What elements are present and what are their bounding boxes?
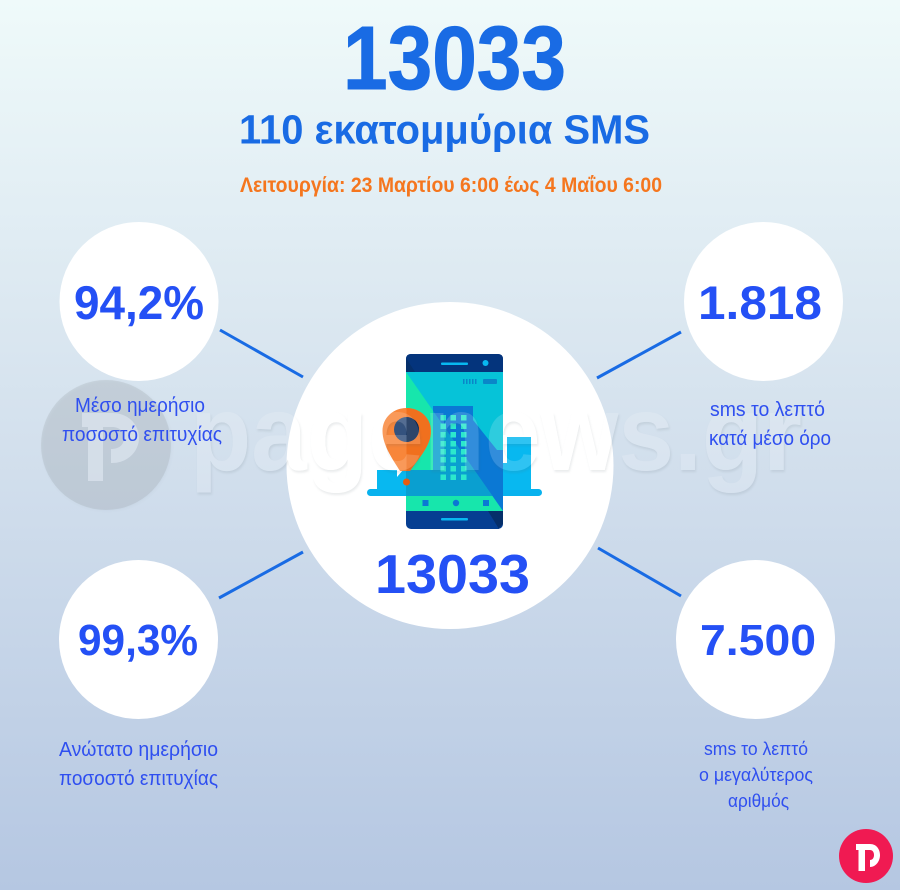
label: peak sms per minute: ο μεγαλύτερος — [699, 765, 813, 785]
label: highest daily success: ποσοστό επιτυχίας — [59, 768, 218, 790]
phone body — [406, 354, 503, 529]
watermark badge — [41, 380, 171, 510]
stat: highest daily success: 99,3% — [78, 616, 198, 665]
phone top bar shade — [406, 354, 503, 372]
top corner shade — [406, 358, 415, 372]
label: peak sms per minute — [699, 739, 813, 811]
stat: average daily success: 94,2% — [74, 276, 204, 329]
stat: peak sms per minute — [676, 560, 835, 719]
label: average sms per minute: κατά μέσο όρο — [709, 428, 831, 450]
centre circle — [286, 302, 614, 629]
connector lines — [219, 330, 681, 598]
stat: highest daily success — [59, 560, 218, 719]
centre number: 13033 — [375, 543, 530, 605]
stat: peak sms per minute: 7.500 — [700, 616, 816, 665]
bottom corner shade — [488, 511, 503, 529]
label: average daily success — [62, 395, 222, 446]
subtitle: 110 εκατομμύρια SMS — [239, 106, 650, 152]
watermark — [41, 372, 802, 510]
skyline light half — [406, 411, 492, 496]
phone nav buttons — [422, 500, 428, 506]
operating period: Λειτουργία: 23 Μαρτίου 6:00 έως 4 Μαΐου 6:00 — [240, 174, 662, 197]
phone top details — [441, 362, 468, 365]
label: average daily success: ποσοστό επιτυχίας — [62, 424, 222, 446]
label: peak sms per minute: sms το λεπτό — [704, 739, 808, 759]
city baseline — [367, 489, 542, 496]
phone screen — [406, 372, 503, 511]
stat: average sms per minute — [684, 222, 843, 381]
stat: average sms per minute: 1.818 — [698, 276, 822, 329]
skyline dark half — [433, 406, 503, 511]
label: highest daily success — [59, 739, 218, 790]
watermark wordmark: pagenews.gr — [190, 372, 802, 493]
logo badge — [839, 829, 893, 883]
pin dot — [403, 478, 410, 486]
label: average sms per minute — [709, 399, 831, 450]
building windows — [440, 415, 466, 480]
label: peak sms per minute: αριθμός — [728, 791, 789, 811]
pin centre — [394, 417, 419, 442]
label: highest daily success: Ανώτατο ημερήσιο — [59, 739, 218, 761]
screen diagonal green — [406, 372, 503, 511]
map pin — [382, 408, 431, 471]
label: average sms per minute: sms το λεπτό — [710, 399, 825, 421]
city blocks beside phone — [377, 437, 531, 490]
title: 13033 — [343, 9, 566, 109]
notch under pin — [397, 470, 403, 477]
label: average daily success: Μέσο ημερήσιο — [75, 395, 205, 417]
stat: average daily success — [60, 222, 218, 381]
icon: phone with city and map pin — [367, 354, 542, 529]
